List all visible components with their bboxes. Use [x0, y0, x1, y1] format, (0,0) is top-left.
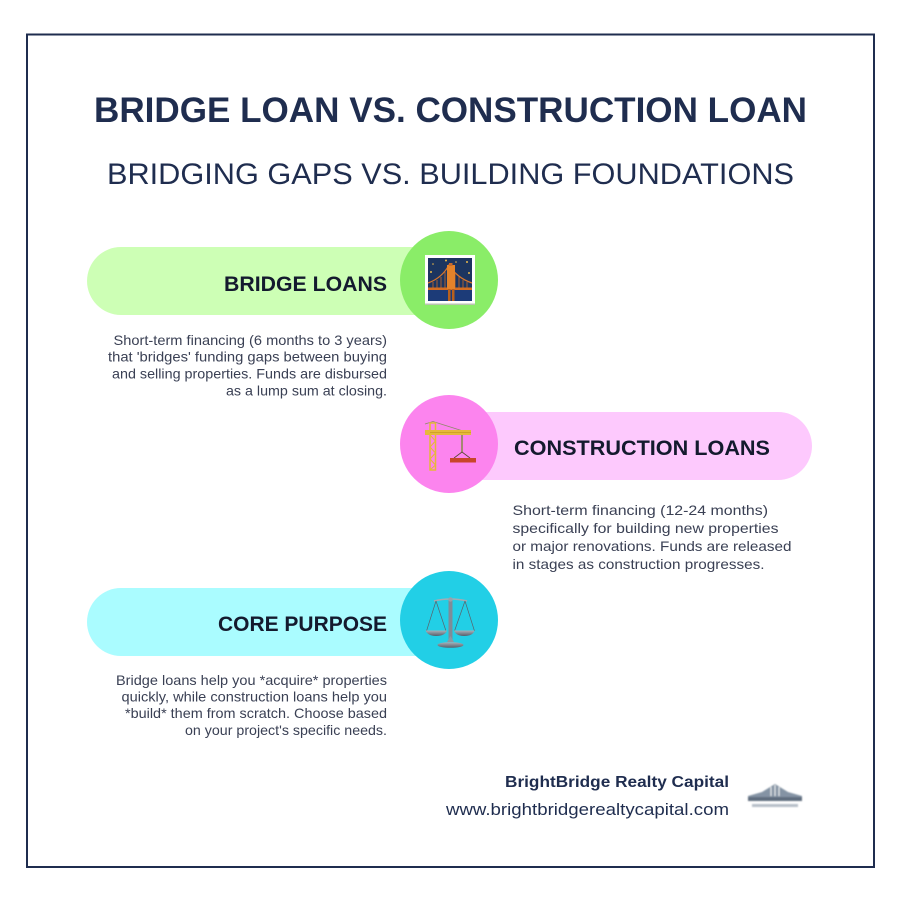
icon: balance scale [426, 597, 474, 648]
title: BRIDGE LOAN VS. CONSTRUCTION LOAN [94, 91, 807, 130]
panel: construction loans [400, 395, 812, 493]
core purpose description: on your project's specific needs. [185, 722, 387, 738]
core purpose pill [87, 588, 450, 656]
panel: bridge loans [87, 231, 498, 329]
icon: bridge at night [425, 255, 475, 305]
core purpose circle [400, 571, 498, 669]
bridge loans heading: BRIDGE LOANS [224, 272, 387, 296]
icon: company logo [748, 784, 802, 807]
construction loans description: or major renovations. Funds are released [512, 538, 792, 554]
bridge loans description: and selling properties. Funds are disbursed [112, 366, 387, 382]
construction loans description: Short-term financing (12-24 months) [512, 502, 768, 518]
bridge loans circle [400, 231, 498, 329]
construction loans heading: CONSTRUCTION LOANS [514, 436, 770, 460]
construction loans circle [400, 395, 498, 493]
bridge loans pill [87, 247, 450, 315]
core purpose heading: CORE PURPOSE [218, 612, 387, 636]
construction loans description: specifically for building new properties [512, 520, 778, 536]
core purpose description: quickly, while construction loans help you [122, 688, 387, 704]
footer: website: www.brightbridgerealtycapital.com [445, 801, 729, 819]
bridge loans description: Short-term financing (6 months to 3 years) [114, 332, 387, 348]
construction loans pill [450, 412, 812, 480]
bridge loans description [108, 332, 387, 398]
core purpose description: *build* them from scratch. Choose based [125, 705, 387, 721]
subtitle: BRIDGING GAPS VS. BUILDING FOUNDATIONS [107, 158, 794, 191]
icon: crane [425, 422, 476, 470]
construction loans description [512, 502, 792, 572]
panel: core purpose [87, 571, 498, 669]
core purpose description: Bridge loans help you *acquire* properties [116, 672, 387, 688]
core purpose description [116, 672, 387, 738]
footer: company name: BrightBridge Realty Capital [505, 774, 729, 791]
bridge loans description: as a lump sum at closing. [226, 382, 387, 398]
bridge loans description: that 'bridges' funding gaps between buying [108, 348, 387, 364]
construction loans description: in stages as construction progresses. [512, 556, 764, 572]
